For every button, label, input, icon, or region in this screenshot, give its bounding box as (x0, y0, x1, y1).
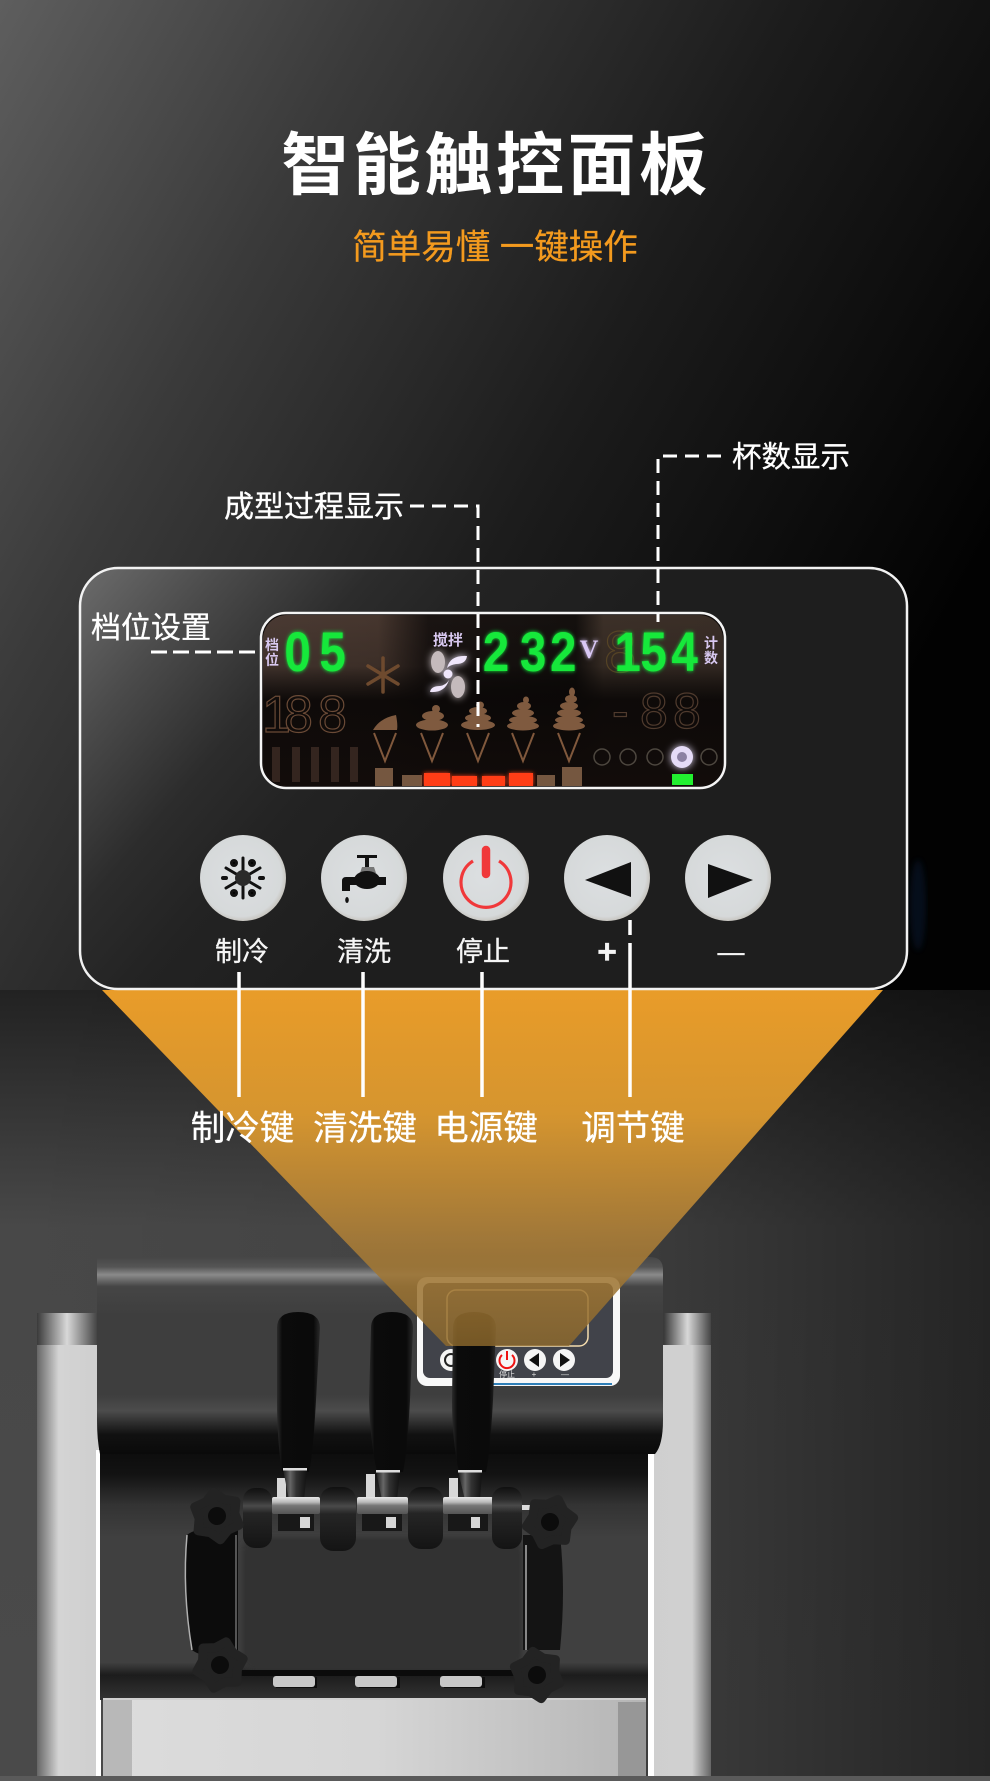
mini control panel: — (561, 1370, 569, 1379)
button: plus (564, 835, 650, 921)
button captions: 停止 (456, 937, 510, 967)
snowflake segment (368, 658, 398, 692)
inner dark panel (242, 1537, 522, 1671)
bottom strip (0, 1776, 990, 1781)
key labels: 电源键 (434, 1110, 538, 1148)
button captions: 清洗 (337, 937, 391, 967)
LCD display (261, 613, 725, 788)
key labels: 清洗键 (313, 1110, 417, 1148)
label: gear setting with leader: 档位设置 (91, 612, 211, 645)
lcd tag count (704, 635, 718, 666)
active status icon (671, 746, 693, 768)
ghost digit before cup count: 8 (604, 620, 636, 685)
ghost digits 188: 188 (262, 686, 347, 744)
soft serve cones (374, 733, 580, 761)
icon: faucet (342, 855, 386, 903)
subtitle: 简单易懂 一键操作 (352, 229, 638, 267)
button captions: + (597, 933, 617, 971)
lcd tag stir: 搅拌 (433, 631, 463, 649)
icon: power (461, 850, 511, 907)
fan icon (430, 651, 467, 698)
volt symbol: V (580, 635, 599, 664)
lcd tag gear: 档 (265, 637, 279, 653)
button captions: 制冷 (215, 937, 269, 967)
machine head (97, 1257, 663, 1454)
mini control panel: 停止 (499, 1369, 515, 1379)
orange spotlight beam (102, 990, 883, 1346)
control panel frame (80, 568, 907, 989)
machine body (100, 1450, 648, 1700)
title: 智能触控面板 (281, 128, 711, 204)
lcd tag count: 计 (704, 635, 718, 651)
button: refrigerate (200, 835, 286, 921)
label: cup count with leader (658, 441, 850, 622)
lcd border (261, 613, 725, 788)
machine illustration (0, 1257, 990, 1781)
label: forming process with leader (224, 491, 478, 727)
key labels: 调节键 (581, 1110, 685, 1148)
button captions (215, 933, 744, 971)
label: forming process with leader: 成型过程显示 (224, 491, 404, 524)
icon: left arrow (585, 862, 631, 897)
key labels (191, 1110, 685, 1148)
handle necks and silver bars (272, 1468, 530, 1531)
left column (37, 1313, 101, 1781)
lcd tag gear: 位 (265, 652, 279, 668)
green status bar (672, 774, 693, 785)
button captions: — (718, 937, 744, 967)
status icons (594, 749, 717, 765)
icon: snowflake (223, 858, 263, 898)
green digits 154: 154 (614, 621, 698, 684)
lcd tag count: 数 (704, 650, 718, 666)
soft serve swirls (373, 688, 585, 730)
nozzle frame arms (185, 1528, 563, 1676)
ghost level bars (272, 747, 358, 782)
mini control panel: + (532, 1370, 537, 1379)
button: wash (321, 835, 407, 921)
lcd tag gear (265, 637, 279, 668)
red active bars (424, 773, 533, 786)
ghost digits -88: -88 (612, 683, 701, 739)
drip feet (273, 1676, 485, 1688)
heater bars (375, 767, 582, 786)
button: stop (443, 835, 529, 921)
leader lines (239, 920, 630, 1097)
icon: right arrow (708, 864, 753, 898)
key labels: 制冷键 (191, 1110, 294, 1148)
label: cup count with leader: 杯数显示 (732, 441, 850, 474)
mini control panel (417, 1277, 620, 1386)
button: minus (685, 835, 771, 921)
green digits 05: 05 (284, 621, 346, 684)
lever handles (277, 1312, 496, 1472)
rollers (243, 1487, 522, 1551)
steel base (103, 1698, 646, 1777)
green digits 232: 232 (483, 621, 576, 684)
star knobs (193, 1489, 578, 1702)
right column (648, 1313, 711, 1781)
